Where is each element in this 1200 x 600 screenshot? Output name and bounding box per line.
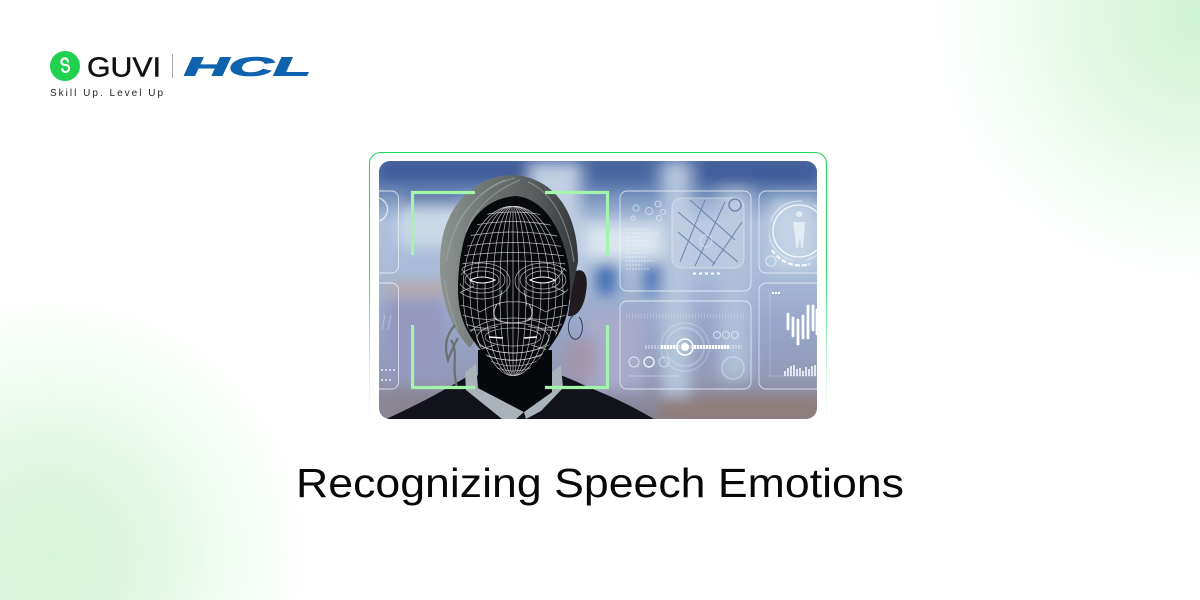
HUD: dial panel	[626, 316, 745, 379]
HUD panel outlines	[379, 190, 817, 390]
icon: GUVI logo	[50, 51, 80, 81]
green focus brackets	[412, 192, 608, 388]
facial mesh	[454, 206, 571, 376]
HCL wordmark: HCL	[184, 52, 311, 82]
lips highlight	[489, 337, 537, 338]
GUVI wordmark: GUVI	[87, 52, 161, 82]
logo lockup	[50, 51, 311, 99]
dark face	[458, 196, 570, 350]
neck	[478, 350, 552, 412]
HUD layer	[379, 190, 817, 390]
hair mass	[440, 175, 578, 348]
HUD: body scan panel	[765, 200, 817, 267]
eyes	[470, 277, 555, 283]
HUD: map panel	[626, 198, 744, 274]
HUD: left panel marks	[379, 198, 396, 380]
shoulders	[386, 372, 654, 419]
ear and earring	[568, 270, 587, 316]
hair strands	[445, 178, 574, 330]
silhouette: hair, neck and shoulders	[386, 175, 654, 419]
title: Recognizing Speech Emotions	[296, 460, 904, 506]
logo divider	[172, 54, 173, 78]
image card border	[370, 152, 826, 426]
loose strands	[446, 325, 458, 388]
collar	[465, 364, 524, 419]
HUD: waveform panel	[767, 292, 817, 376]
background glow: top right	[880, 0, 1200, 320]
photo background: blurred office	[379, 161, 820, 422]
background glow: bottom left	[0, 250, 345, 600]
photo: face scan	[379, 161, 817, 419]
tagline: Skill Up. Level Up	[50, 88, 163, 99]
